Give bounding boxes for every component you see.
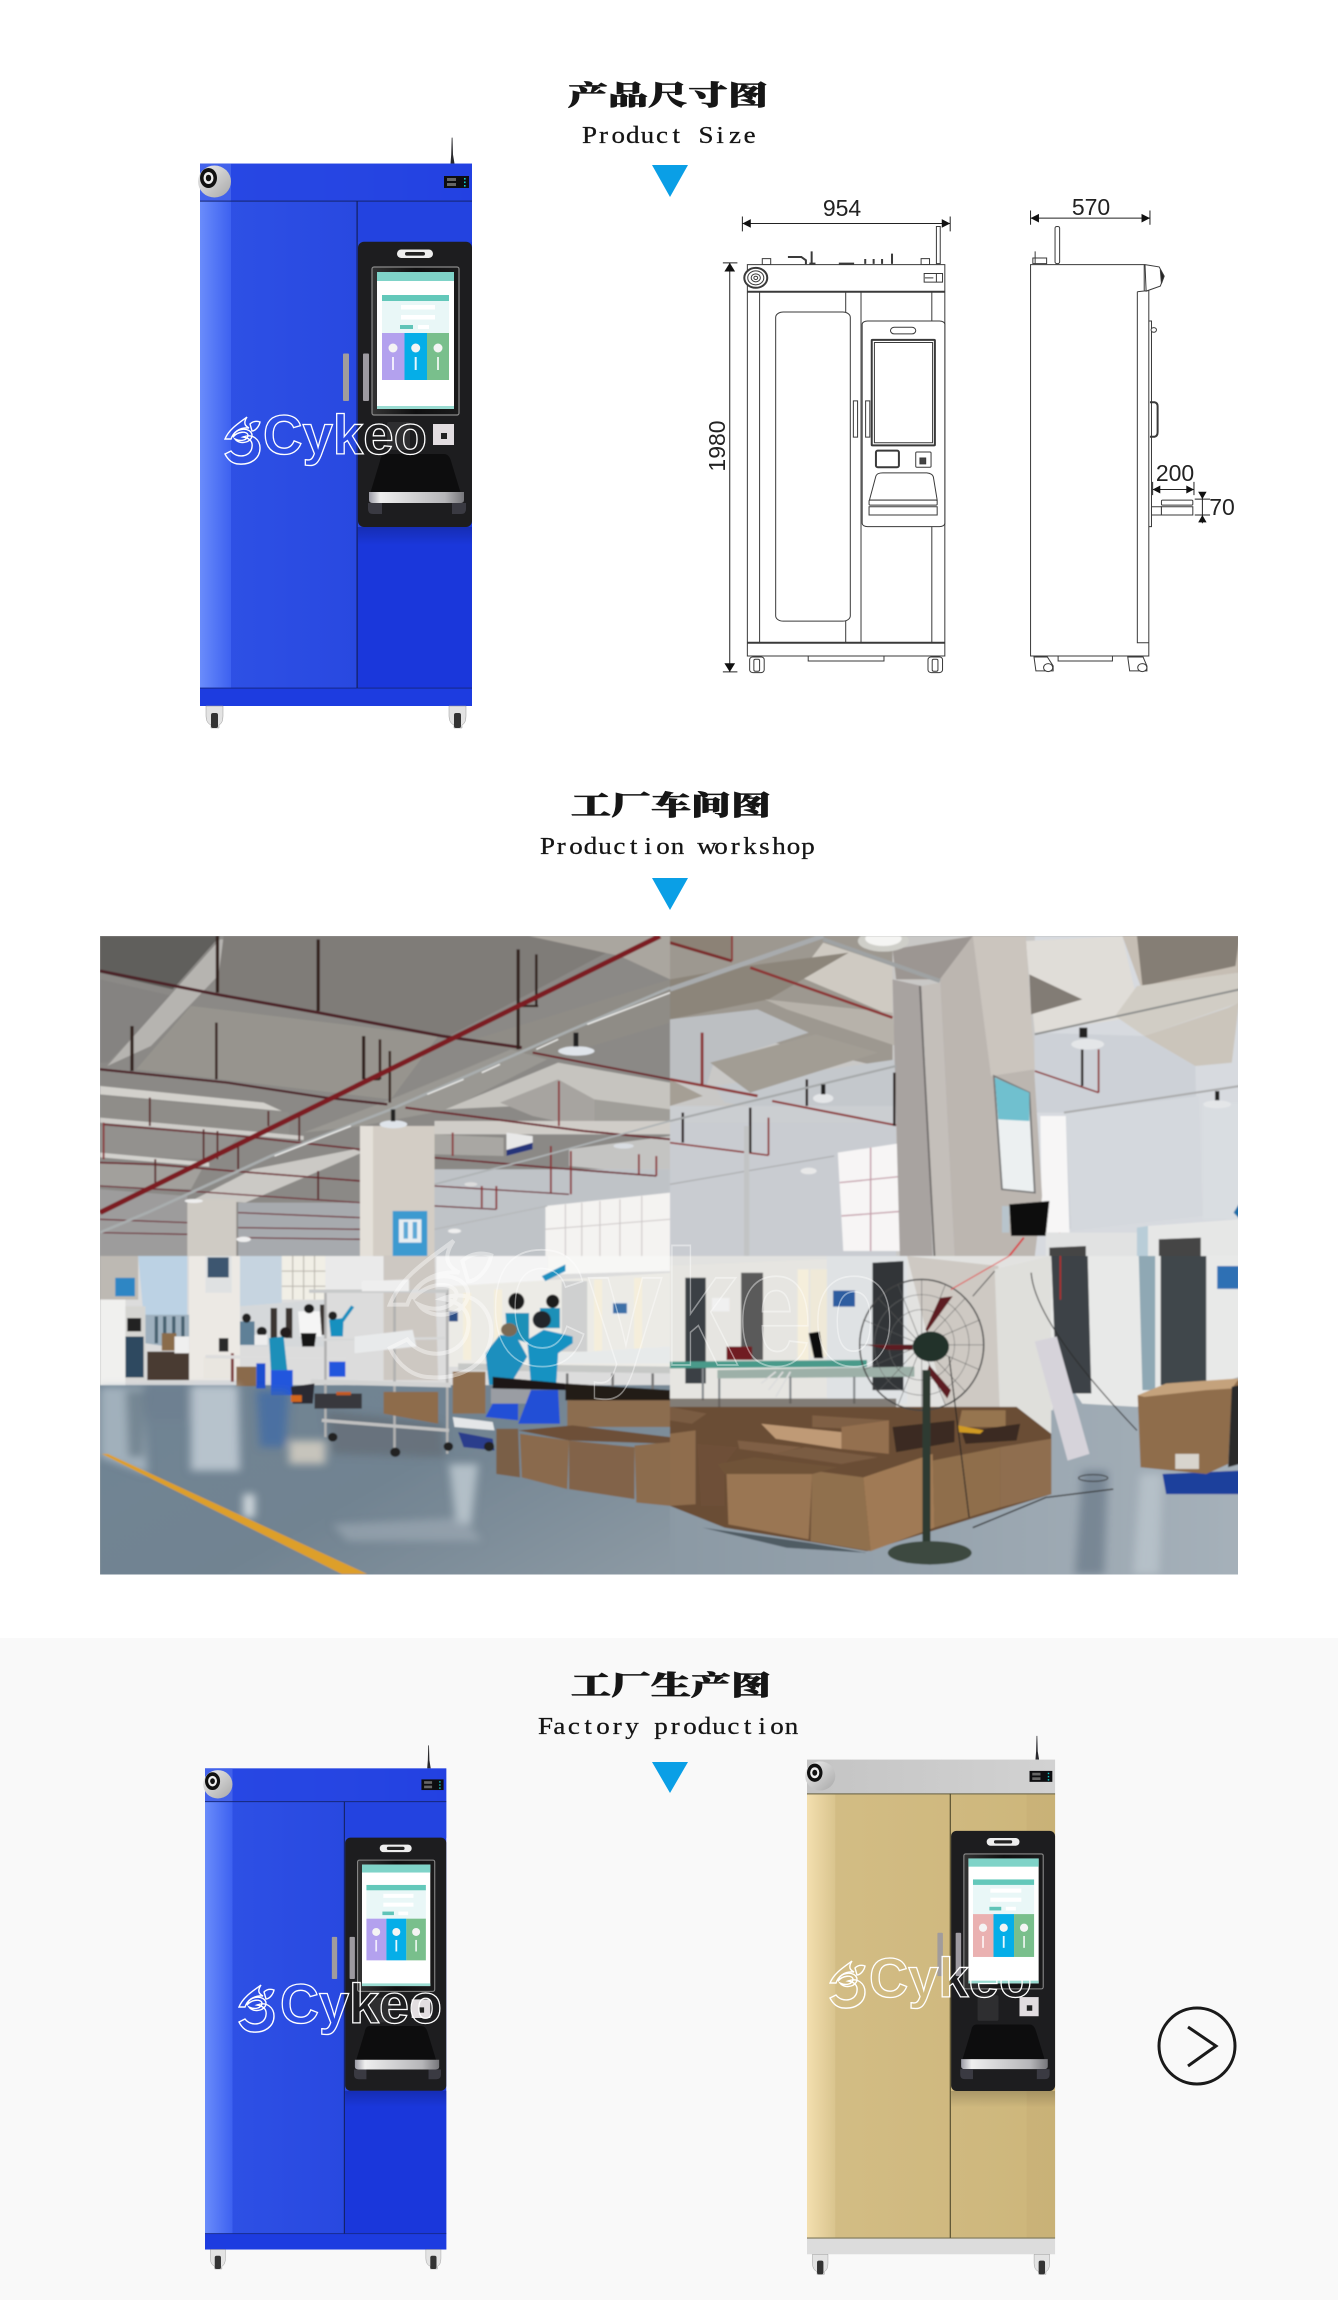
dimension lines and arrows bbox=[723, 211, 1210, 672]
page background bbox=[0, 0, 1338, 1638]
heading: production workshop: Production workshop bbox=[540, 833, 815, 860]
photo: floor and workers left quadrant bbox=[100, 1256, 670, 1578]
heading: product size: 产品尺寸图 bbox=[568, 74, 768, 113]
floor reflections bbox=[100, 1385, 482, 1541]
icon: blue down triangle bbox=[652, 165, 688, 197]
box stack behind bbox=[453, 1372, 485, 1414]
dimension label: width 954: 954 bbox=[823, 195, 861, 221]
photo: ceiling left quadrant bbox=[100, 936, 670, 1256]
heading: product size bbox=[568, 74, 768, 149]
dimension drawing: side view bbox=[1031, 226, 1193, 672]
icon: blue down triangle bbox=[652, 1762, 688, 1793]
fan bbox=[860, 1279, 984, 1410]
right carton bbox=[1162, 1471, 1240, 1494]
dimension label: tray height 70: 70 bbox=[1209, 494, 1235, 520]
boxes bbox=[567, 1400, 670, 1427]
dimension label: tray depth 200: 200 bbox=[1156, 460, 1194, 486]
icon: blue down triangle bbox=[652, 878, 688, 910]
blue cabinet: factory view bbox=[203, 1745, 446, 2269]
dimension label: height 1980: 1980 bbox=[704, 420, 730, 472]
photo: ceiling right quadrant bbox=[670, 930, 1240, 1256]
heading: factory production bbox=[538, 1664, 799, 1740]
panel: factory production background bbox=[0, 1638, 1338, 2300]
blue cabinet: product view bbox=[198, 138, 472, 728]
watermark logo: Cykeo on factory blue cabinet: Cykeo bbox=[280, 1972, 442, 2035]
watermark logo: Cykeo on tan cabinet: Cykeo bbox=[869, 1946, 1032, 2009]
dimension drawing: front view bbox=[744, 226, 945, 673]
metal rack bbox=[325, 1290, 447, 1454]
photo: faint watermark logo bbox=[387, 1239, 890, 1400]
watermark logo: Cykeo on blue cabinet: Cykeo bbox=[263, 403, 427, 466]
workers bbox=[458, 1363, 670, 1373]
tan cabinet: factory view bbox=[805, 1736, 1055, 2274]
icon: next arrow circle bbox=[1159, 2008, 1235, 2084]
cartons bbox=[670, 1407, 1051, 1551]
heading: production workshop bbox=[540, 784, 815, 860]
heading: factory production: 工厂生产图 bbox=[571, 1664, 771, 1703]
cart bbox=[453, 1417, 495, 1430]
heading: product size: Product Size bbox=[582, 122, 756, 149]
photo: faint watermark logo: Cykeo bbox=[490, 1216, 895, 1400]
photo: boxes and fan right quadrant bbox=[670, 1256, 1240, 1578]
photo: factory workshop bbox=[100, 930, 1240, 1578]
dimension label: depth 570: 570 bbox=[1072, 194, 1110, 220]
heading: production workshop: 工厂车间图 bbox=[571, 784, 771, 823]
heading: factory production: Factory production bbox=[538, 1713, 799, 1740]
